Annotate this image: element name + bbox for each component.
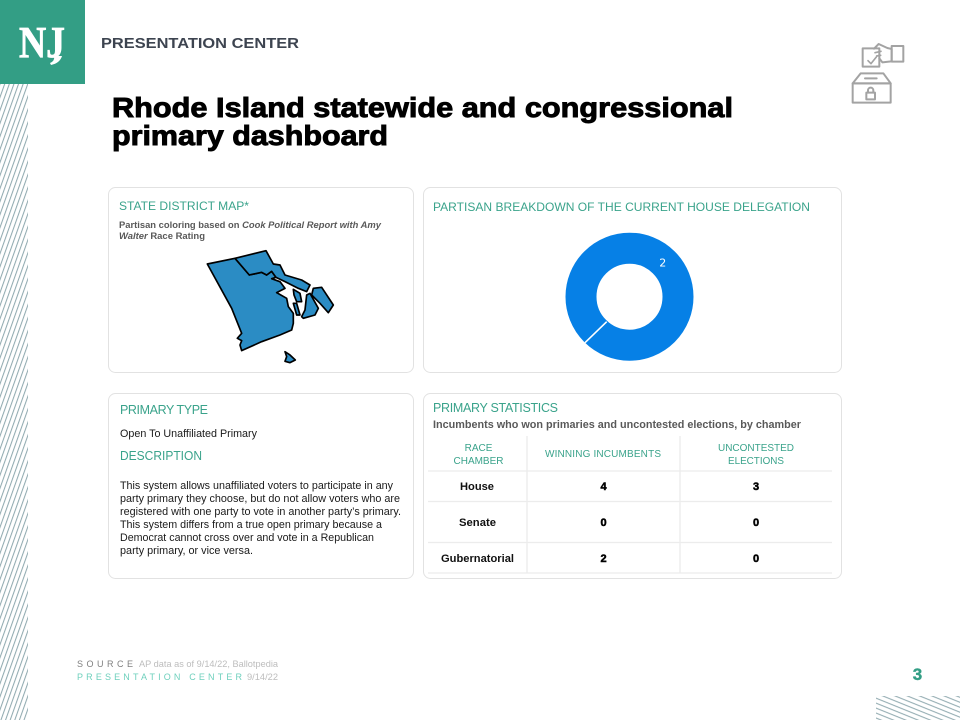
title: [112, 92, 733, 151]
title: primary dashboard: [112, 120, 388, 151]
statistics table: [428, 436, 832, 573]
description text: This system differs from a true open primary because a: [120, 519, 382, 531]
statistics table: House: [460, 481, 494, 493]
description text: Democrat cannot cross over and vote in a Republican: [120, 532, 374, 544]
panel: primary statistics: [424, 394, 842, 578]
title: Rhode Island statewide and congressional: [112, 92, 733, 123]
map note: [119, 220, 382, 242]
description text: [120, 480, 401, 557]
footer: source: 9/14/22: [247, 672, 278, 683]
heading: partisan breakdown: PARTISAN BREAKDOWN OF THE CURRENT HOUSE DELEGATION: [433, 200, 810, 214]
panel: state district map: [108, 188, 414, 372]
heading: state district map: STATE DISTRICT MAP*: [119, 199, 249, 213]
logo: NJ: NJ: [19, 18, 65, 67]
description text: party primary, or vice versa.: [120, 545, 253, 557]
map note: Walter Race Rating: [119, 231, 205, 242]
statistics table: 0: [753, 517, 759, 529]
statistics table: 0: [753, 553, 759, 565]
map: Rhode Island districts: [207, 251, 333, 363]
statistics table: RACE: [465, 443, 493, 454]
donut chart: 2: [659, 256, 666, 270]
brand name: PRESENTATION CENTER: [101, 36, 300, 52]
footer: source: AP data as of 9/14/22, Ballotpedia: [139, 659, 279, 670]
statistics table: 2: [600, 553, 607, 565]
statistics subtitle: Incumbents who won primaries and uncontested elections, by chamber: [433, 419, 802, 431]
panel: primary type and description: [108, 394, 414, 578]
statistics table: 0: [600, 517, 607, 529]
panel: partisan breakdown: [424, 188, 842, 372]
logo: NJ: [0, 0, 85, 84]
statistics table: ELECTIONS: [728, 456, 784, 467]
page number: 3: [913, 665, 922, 684]
primary type value: Open To Unaffiliated Primary: [120, 428, 258, 440]
statistics table: 4: [600, 481, 607, 493]
heading: description: DESCRIPTION: [120, 449, 202, 463]
map note: Partisan coloring based on Cook Political Report with Amy: [119, 220, 382, 231]
statistics table: UNCONTESTED: [718, 443, 794, 454]
description text: This system allows unaffiliated voters to participate in any: [120, 480, 394, 492]
donut chart: [581, 248, 678, 345]
footer: source: [77, 659, 279, 683]
heading: primary type: PRIMARY TYPE: [120, 403, 208, 417]
statistics table: Gubernatorial: [441, 553, 514, 565]
footer: source: PRESENTATION CENTER: [77, 672, 242, 682]
footer: source: SOURCE: [77, 659, 133, 669]
icon: ballot box: [853, 44, 903, 103]
statistics table: CHAMBER: [454, 456, 504, 467]
statistics table: WINNING INCUMBENTS: [545, 449, 661, 460]
description text: registered with one party to vote in another party’s primary.: [120, 506, 401, 518]
statistics table: 3: [753, 481, 759, 493]
heading: primary statistics: PRIMARY STATISTICS: [433, 401, 558, 415]
statistics table: Senate: [459, 517, 496, 529]
description text: party primary they choose, but do not allow voters who are: [120, 493, 400, 505]
